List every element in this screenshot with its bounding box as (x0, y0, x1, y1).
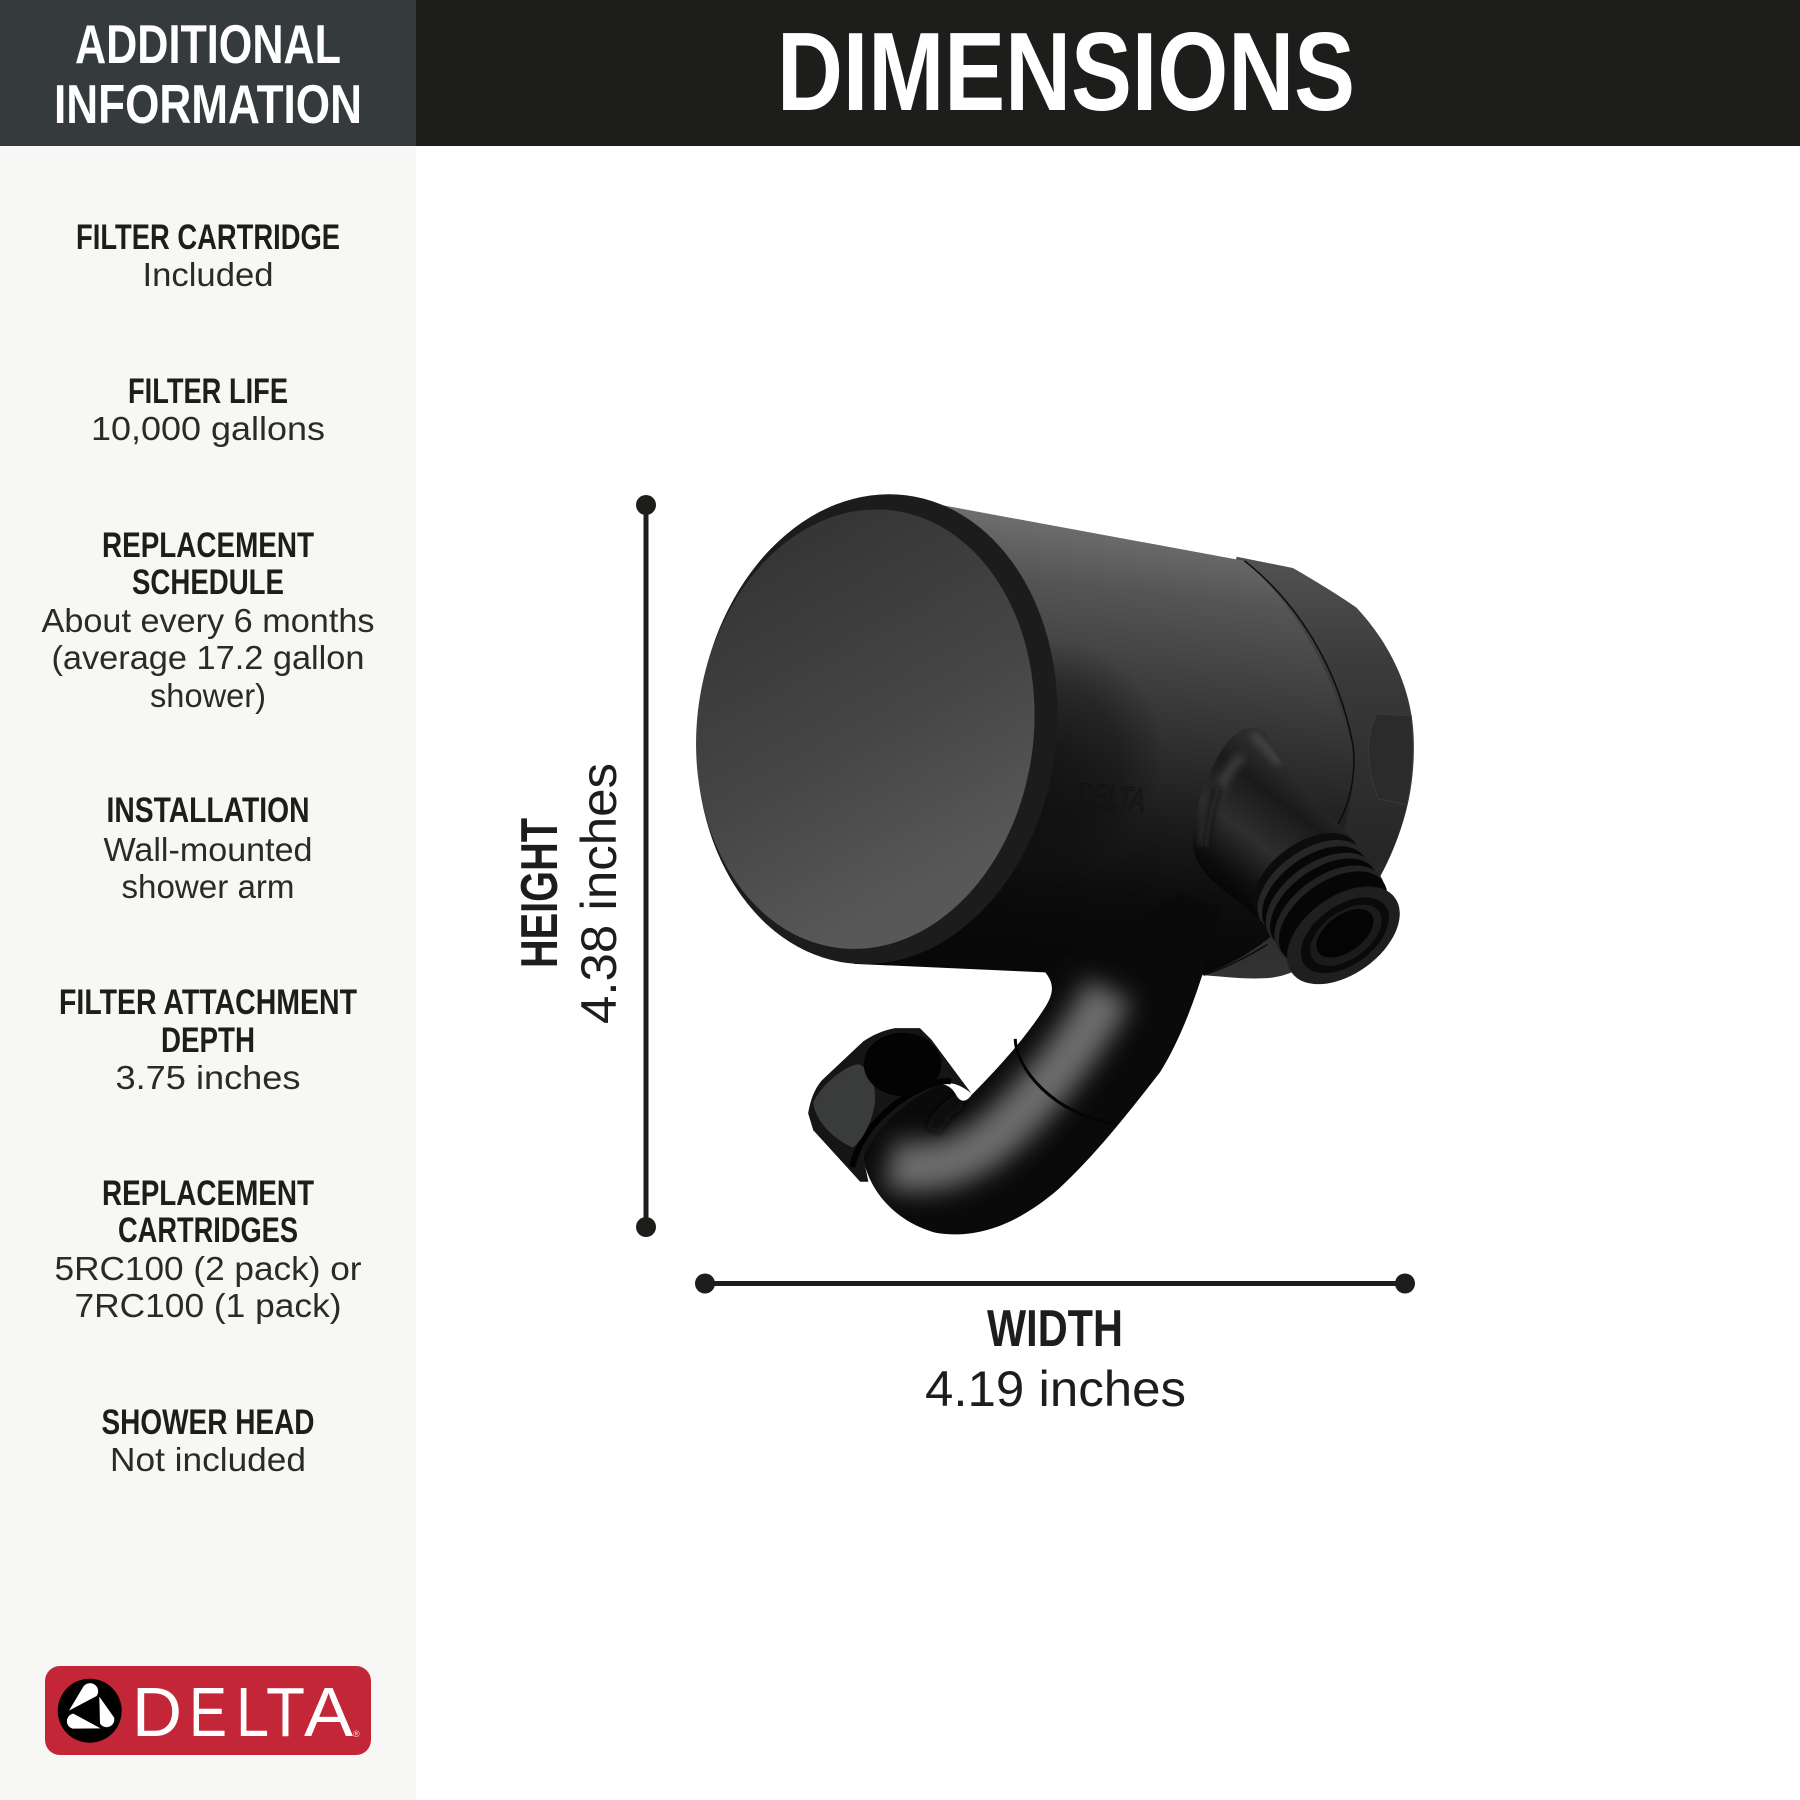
body shading (931, 638, 1165, 873)
header: additional information block (0, 0, 416, 146)
spec: filter cartridge: Included (142, 256, 274, 293)
seam between cylinder and cap (1204, 561, 1354, 975)
logo: delta badge: T (266, 1673, 305, 1751)
spec: filter attachment depth: FILTER ATTACHMENT (59, 983, 357, 1022)
logo: delta badge: ® (353, 1729, 360, 1739)
spec: filter attachment depth: DEPTH (161, 1021, 255, 1060)
spec: installation: shower arm (122, 868, 294, 905)
logo: delta badge: E (189, 1673, 227, 1751)
hex nut: dark facet (864, 1033, 941, 1096)
width dimension line (695, 1274, 1415, 1294)
spec: filter attachment depth: 3.75 inches (116, 1059, 300, 1096)
spec: replacement schedule (42, 526, 374, 714)
panel: additional information sidebar (0, 0, 416, 1800)
height dimension line (636, 495, 656, 1237)
product: shower filter (670, 473, 1418, 1234)
cap: side recess (1369, 714, 1413, 805)
hex nut: side facet (813, 1064, 875, 1148)
heading: additional information: INFORMATION (54, 73, 362, 135)
logo: delta badge (45, 1666, 371, 1755)
spec: shower head: SHOWER HEAD (102, 1403, 314, 1442)
spec: replacement cartridges: 5RC100 (2 pack) or (54, 1250, 362, 1287)
spec: shower head: Not included (110, 1441, 306, 1478)
spec: filter life (91, 372, 325, 447)
height label: 4.38 inches (571, 763, 627, 1024)
spec: installation: Wall-mounted (104, 831, 312, 868)
arm: curved pipe (863, 968, 1202, 1234)
arm: collar seam (1015, 1039, 1117, 1124)
heading: additional information (54, 13, 362, 135)
spec: replacement cartridges: CARTRIDGES (118, 1211, 298, 1250)
spec: replacement cartridges (54, 1174, 362, 1324)
logo: delta badge: A (304, 1673, 353, 1751)
cylinder body (854, 496, 1353, 975)
outlet stem (1193, 728, 1339, 897)
logo: delta badge: L (236, 1673, 269, 1751)
end cap (1160, 557, 1414, 978)
logo: delta badge: D (132, 1673, 182, 1751)
hex nut (808, 1028, 971, 1182)
spec: replacement schedule: SCHEDULE (132, 563, 284, 602)
height label: HEIGHT (511, 818, 569, 968)
spec: installation: INSTALLATION (106, 791, 310, 830)
spec: replacement schedule: About every 6 months (42, 602, 374, 639)
spec: installation (104, 791, 312, 905)
spec: filter attachment depth (59, 983, 357, 1096)
spec: replacement schedule: shower) (150, 677, 266, 714)
spec: filter cartridge: FILTER CARTRIDGE (76, 218, 340, 257)
header: dimensions bar (416, 0, 1800, 146)
threaded outlet (1237, 815, 1418, 1004)
spec: replacement cartridges: 7RC100 (1 pack) (74, 1287, 342, 1324)
spec: shower head (102, 1403, 314, 1478)
width label: WIDTH (987, 1300, 1123, 1358)
collar groove (852, 1081, 951, 1167)
spec: replacement schedule: (average 17.2 gallon (52, 639, 364, 676)
spec: filter life: FILTER LIFE (128, 372, 288, 411)
spec: replacement cartridges: REPLACEMENT (102, 1174, 314, 1213)
heading: additional information: ADDITIONAL (75, 13, 341, 75)
title: dimensions: DIMENSIONS (777, 10, 1355, 134)
front ring (670, 473, 1084, 985)
spec: filter cartridge (76, 218, 340, 293)
front face (671, 490, 1059, 968)
delta engraving: DELTA (1073, 776, 1150, 820)
height label (511, 763, 627, 1024)
spec: replacement schedule: REPLACEMENT (102, 526, 314, 565)
width label (925, 1300, 1186, 1417)
width label: 4.19 inches (925, 1361, 1186, 1417)
spec: filter life: 10,000 gallons (91, 410, 325, 447)
